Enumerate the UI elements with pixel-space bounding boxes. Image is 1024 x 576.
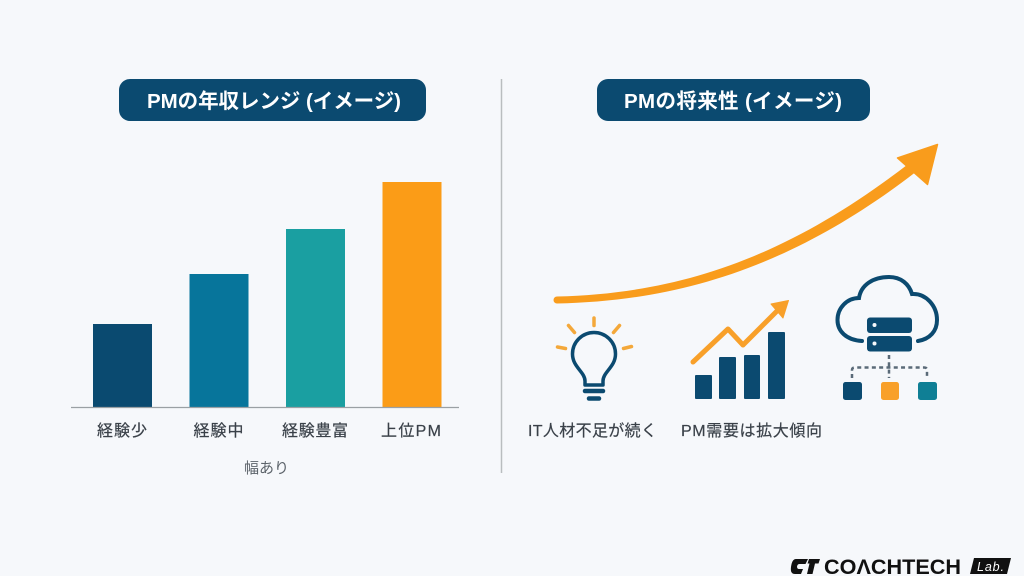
label: experience mid: 経験中 xyxy=(194,422,244,440)
logo: COACHTECH Lab. xyxy=(791,556,1011,576)
label: experience low: 経験少 xyxy=(97,422,147,440)
label: IT shortage: IT人材不足が続く xyxy=(528,422,657,440)
logo badge: Lab. xyxy=(977,560,1004,574)
icon: cloud server network xyxy=(838,277,937,400)
heading: PM future xyxy=(597,79,870,121)
heading: salary range: PMの年収レンジ (イメージ) xyxy=(147,90,401,113)
icon: growth chart xyxy=(693,300,788,399)
label: PM demand: PM需要は拡大傾向 xyxy=(681,422,822,440)
panel: PM future xyxy=(528,79,938,440)
icon: light bulb xyxy=(558,318,632,398)
label: top PM: 上位PM xyxy=(381,422,441,440)
heading: PM future: PMの将来性 (イメージ) xyxy=(624,90,842,113)
panel: salary range xyxy=(71,79,459,477)
label: experience rich: 経験豊富 xyxy=(282,422,348,440)
logo badge xyxy=(970,558,1011,574)
bar chart xyxy=(71,182,459,408)
note: range: 幅あり xyxy=(244,460,289,477)
heading: salary range xyxy=(119,79,426,121)
arrow: rising trend xyxy=(554,144,938,304)
logo mark xyxy=(791,559,820,574)
